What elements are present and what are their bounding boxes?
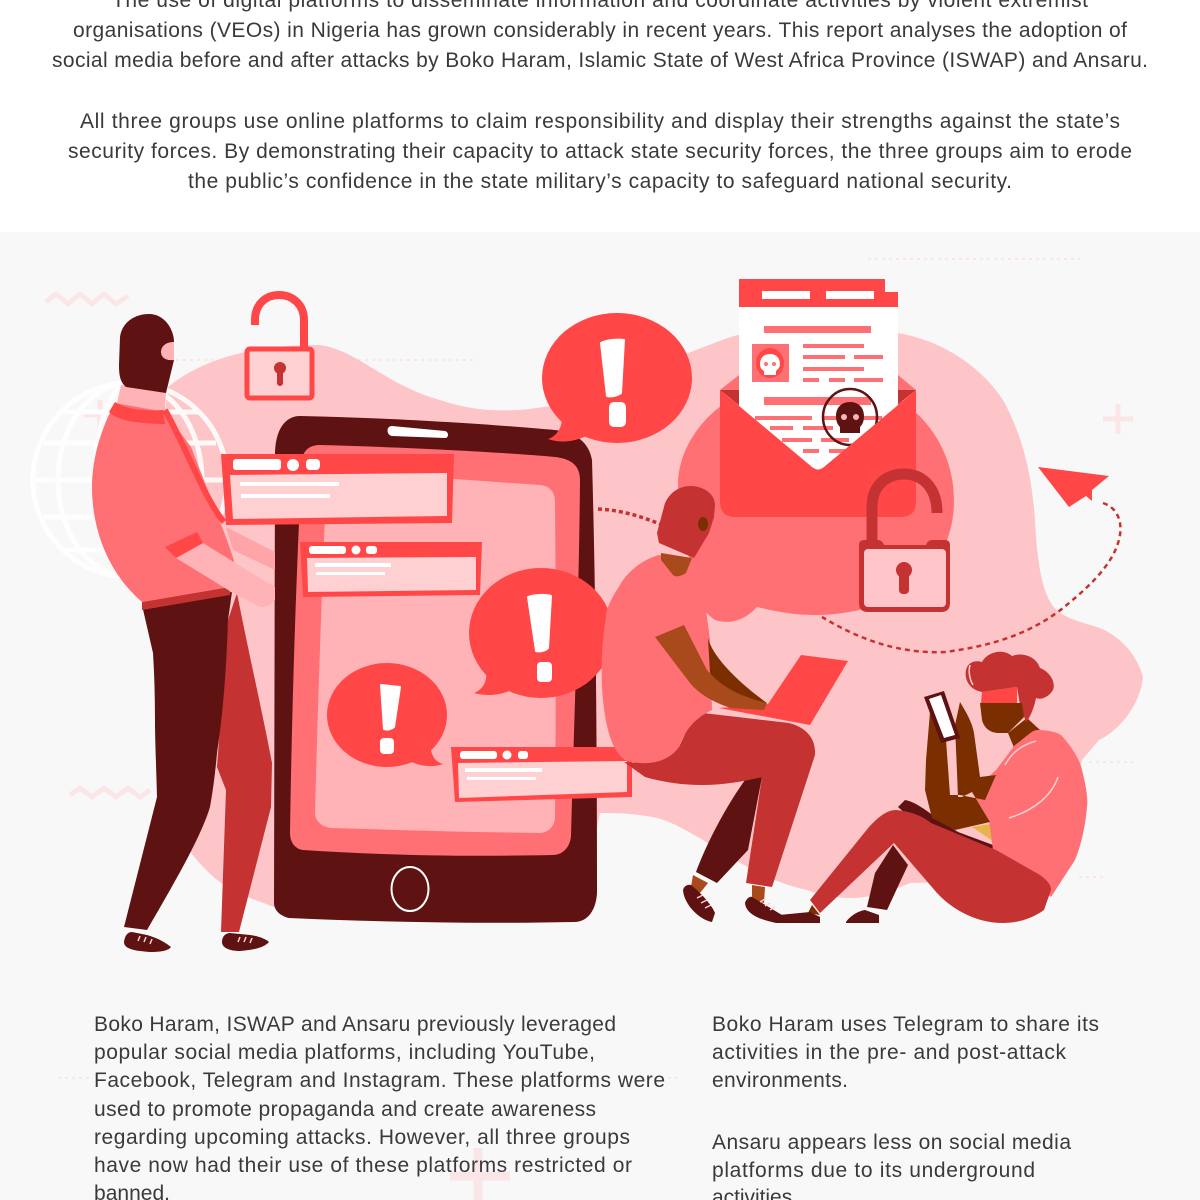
tablet device xyxy=(274,416,597,923)
shirt xyxy=(602,555,712,763)
feet xyxy=(808,905,820,915)
eye xyxy=(698,517,708,531)
alert bubble: middle xyxy=(469,568,613,698)
neck xyxy=(115,385,166,424)
phone xyxy=(924,691,960,743)
body text, right column: Ansaru xyxy=(712,1131,1071,1200)
body text, left column: used to promote propaganda and create awareness xyxy=(94,1098,596,1121)
notification card 3 xyxy=(451,747,632,802)
cuff xyxy=(165,532,203,558)
hair highlight xyxy=(969,665,973,685)
icon: paper plane xyxy=(1038,467,1109,507)
pink background blob xyxy=(156,333,1143,907)
far arm xyxy=(226,527,275,570)
intro text: paragraph one xyxy=(52,0,1148,72)
envelope inner corners xyxy=(720,390,916,406)
body text, right column: Ansaru: Ansaru appears less on social media xyxy=(712,1131,1071,1154)
seated man with phone xyxy=(776,652,1087,923)
back leg xyxy=(867,845,908,910)
hip xyxy=(898,800,993,856)
far arm xyxy=(708,638,767,703)
body text, left column: regarding upcoming attacks. However, all three groups xyxy=(94,1126,630,1149)
icon: open padlock, right xyxy=(859,474,950,612)
body text, right column: Boko Haram: environments. xyxy=(712,1069,848,1092)
notification card 2 xyxy=(300,542,482,597)
forearm and hand xyxy=(176,543,275,607)
front leg xyxy=(810,810,1051,923)
icon: skull badge xyxy=(823,389,877,445)
intro text: paragraph two: security forces. By demonstrating their capacity to attack state security forces, the three groups aim to erode xyxy=(68,140,1132,163)
seated woman with laptop xyxy=(602,486,815,923)
socks xyxy=(691,875,765,903)
back leg xyxy=(696,777,762,883)
tablet inner screen xyxy=(315,470,556,833)
mask band xyxy=(981,687,1017,703)
body text, right column: Boko Haram: activities in the pre- and post-attack xyxy=(712,1041,1066,1064)
intro text: paragraph one: organisations (VEOs) in Nigeria has grown considerably in recent years. This report analyses the adoption of xyxy=(73,19,1127,42)
body text, left column: Facebook, Telegram and Instagram. These platforms were xyxy=(94,1069,665,1092)
intro text: paragraph two: the public’s confidence in the state military’s capacity to safeguard national security. xyxy=(188,170,1012,193)
intro text: paragraph two xyxy=(68,110,1132,193)
headscarf xyxy=(657,486,715,558)
man in balaclava xyxy=(92,314,275,952)
body text, right column: Boko Haram: Boko Haram uses Telegram to share its xyxy=(712,1013,1099,1036)
shoes xyxy=(124,932,269,952)
envelope front xyxy=(720,390,916,517)
alert bubble: lower xyxy=(327,663,447,767)
neck xyxy=(1008,718,1040,750)
shoes xyxy=(683,885,782,923)
intro text: paragraph one: social media before and after attacks by Boko Haram, Islamic State of West Africa Province (ISWAP) and Ansaru. xyxy=(52,49,1148,72)
strap xyxy=(165,410,224,522)
notification card 1 xyxy=(221,454,454,525)
body text, left column: have now had their use of these platforms restricted or xyxy=(94,1154,632,1177)
intro text: paragraph two: All three groups use online platforms to claim responsibility and display their strengths against the state’s xyxy=(80,110,1120,133)
eye opening xyxy=(161,342,174,360)
dotted connector: tablet to woman xyxy=(598,509,660,524)
document sheet xyxy=(739,300,898,480)
trouser leg, dark xyxy=(124,592,232,930)
tablet speaker xyxy=(388,426,448,438)
dashed flight path of paper plane xyxy=(822,503,1120,652)
tablet screen bezel xyxy=(290,445,580,856)
icon: open padlock, left xyxy=(247,295,312,398)
body text, right column: Boko Haram xyxy=(712,1013,1099,1092)
inner coral blob xyxy=(678,375,954,622)
body text, left column: Boko Haram, ISWAP and Ansaru previously leveraged xyxy=(94,1013,616,1036)
body text, left column xyxy=(94,1013,665,1200)
document text lines xyxy=(752,326,883,453)
document xyxy=(739,279,898,480)
waistband xyxy=(142,587,230,610)
collar xyxy=(109,402,165,424)
trouser leg, red xyxy=(217,593,272,932)
tablet home button xyxy=(392,867,428,911)
neck xyxy=(661,553,692,576)
document header xyxy=(739,279,898,307)
envelope back flap xyxy=(720,375,916,390)
body text, left column: popular social media platforms, including YouTube, xyxy=(94,1041,595,1064)
icon: skull portrait xyxy=(756,348,784,378)
waist stripe xyxy=(972,823,996,842)
near arm xyxy=(655,625,767,710)
hair xyxy=(966,652,1054,722)
arms xyxy=(925,702,996,830)
laptop xyxy=(719,655,848,725)
face xyxy=(980,703,1024,733)
body text, right column: Ansaru: platforms due to its underground xyxy=(712,1159,1035,1182)
shirt creases xyxy=(1005,741,1058,818)
sweater xyxy=(92,403,237,602)
balaclava xyxy=(119,314,174,393)
tablet body xyxy=(274,416,597,923)
shirt xyxy=(972,730,1087,897)
icon: globe xyxy=(33,383,227,577)
faint background decorations xyxy=(46,259,1137,1200)
top leg xyxy=(624,713,815,887)
alert bubble: top xyxy=(542,313,692,443)
